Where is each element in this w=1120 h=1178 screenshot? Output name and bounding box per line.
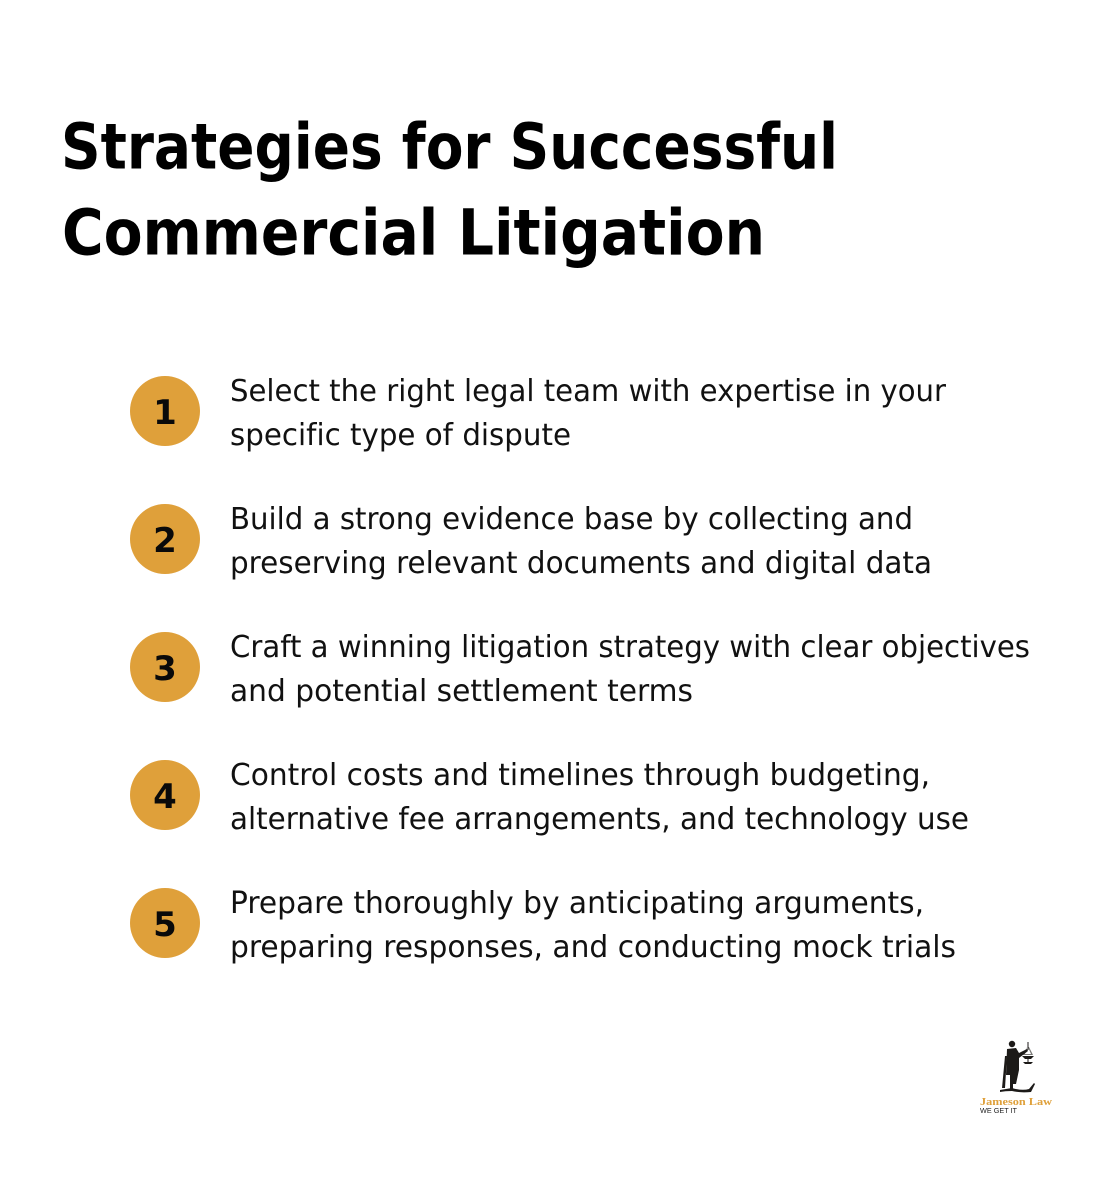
item 3 text: and potential settlement terms [230, 674, 693, 709]
item 2 text [230, 502, 932, 581]
item 4 text: Control costs and timelines through budgeting, [230, 758, 930, 793]
item 4 text: alternative fee arrangements, and technology use [230, 802, 969, 837]
item 1 text [230, 374, 947, 453]
number badge 2 [130, 504, 200, 574]
number badge 4: 4 [153, 777, 177, 817]
number badge 2: 2 [153, 521, 177, 561]
item 5 text [230, 886, 956, 965]
title: Commercial Litigation [62, 196, 765, 270]
number badge 1 [130, 376, 200, 446]
item 4 text [230, 758, 969, 837]
list item 3 [130, 630, 1030, 709]
number badge 3: 3 [153, 649, 177, 689]
number badge 3 [130, 632, 200, 702]
title [61, 110, 838, 270]
number badge 4 [130, 760, 200, 830]
item 1 text: specific type of dispute [230, 418, 571, 453]
item 5 text: preparing responses, and conducting mock trials [230, 930, 956, 965]
item 2 text: preserving relevant documents and digital data [230, 546, 932, 581]
list item 4 [130, 758, 969, 837]
item 2 text: Build a strong evidence base by collecting and [230, 502, 913, 537]
logo name: Jameson Law [980, 1097, 1052, 1108]
logo: Jameson Law [980, 1041, 1052, 1115]
item 5 text: Prepare thoroughly by anticipating arguments, [230, 886, 924, 921]
item 1 text: Select the right legal team with expertise in your [230, 374, 947, 409]
title: Strategies for Successful [61, 110, 838, 184]
item 3 text: Craft a winning litigation strategy with clear objectives [230, 630, 1030, 665]
number badge 5: 5 [153, 905, 177, 945]
list item 5 [130, 886, 956, 965]
icon: lady justice with letter L [1000, 1041, 1035, 1092]
logo tagline: WE GET IT [980, 1108, 1018, 1115]
list item 1 [130, 374, 947, 453]
number badge 5 [130, 888, 200, 958]
list item 2 [130, 502, 932, 581]
number badge 1: 1 [153, 393, 177, 433]
item 3 text [230, 630, 1030, 709]
